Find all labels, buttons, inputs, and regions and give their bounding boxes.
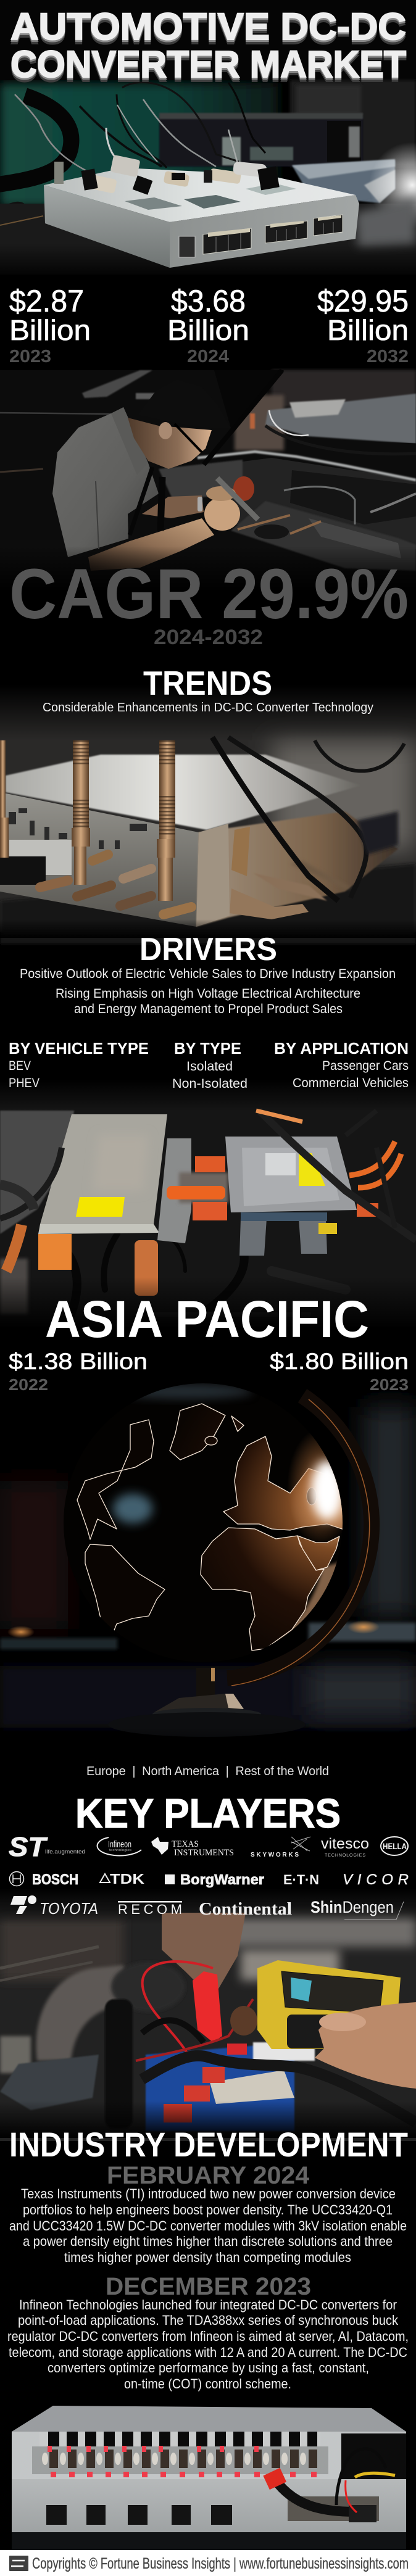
logo: Toyota: TOYOTA [40, 1899, 98, 1918]
logo: TDK: TDK [110, 1871, 144, 1887]
stat: asia pacific 2022: $1.38 Billion [9, 1349, 148, 1374]
stat: 2023: $2.87 [9, 284, 84, 318]
logo: Texas Instruments: INSTRUMENTS [174, 1848, 234, 1858]
heading: drivers: Rising Emphasis on High Voltage Electrical Architecture [56, 987, 360, 1001]
stat: asia pacific 2022 [9, 1349, 148, 1394]
photo: globe on stand [0, 1382, 416, 1765]
logo: Vicor: VICOR [343, 1871, 409, 1888]
photo: EV power electronics [0, 1080, 416, 1330]
stat: 2024: 2024 [187, 347, 229, 367]
heading: drivers [20, 932, 396, 1016]
heading: key players: KEY PLAYERS [75, 1791, 341, 1837]
stat: 2032: 2032 [367, 347, 409, 367]
stat: asia pacific 2023 [270, 1349, 409, 1394]
other regions: Europe | North America | Rest of the World [86, 1765, 329, 1778]
photo: open DC-DC converter unit [12, 2406, 406, 2550]
stat: 2023 [9, 284, 91, 367]
logo: Skyworks: SKYWORKS [251, 1852, 299, 1858]
logo: TDK [100, 1871, 144, 1887]
segment: by type: BY TYPE [174, 1039, 241, 1058]
logo: Recom: RECOM [118, 1902, 182, 1917]
logo row 2 [10, 1871, 409, 1888]
segment: by application: Commercial Vehicles [293, 1076, 409, 1090]
photo: battery charger on car battery [0, 1888, 416, 2141]
logo: Toyota [10, 1895, 98, 1918]
logo: Infineon: technologies [109, 1849, 132, 1852]
logo: Vitesco: TECHNOLOGIES [325, 1853, 365, 1858]
footer bar [0, 2550, 416, 2576]
logo row 1 [9, 1832, 408, 1862]
logo: ShinDengen: ShinDengen [310, 1898, 394, 1916]
logo: Continental: Continental [199, 1899, 292, 1919]
heading: drivers: and Energy Management to Propel Product Sales [74, 1002, 343, 1016]
segment: by type: Isolated [186, 1059, 233, 1074]
heading: asia pacific: ASIA PACIFIC [45, 1290, 369, 1348]
logo: BorgWarner: BorgWarner [180, 1871, 264, 1887]
stat: 2032: $29.95 [317, 284, 409, 318]
logo: Infineon [98, 1837, 141, 1855]
logo: ST: life.augmented [45, 1849, 85, 1855]
hero photo: DC-DC converter with cables [0, 0, 416, 370]
development: December 2023 [7, 2273, 409, 2392]
segment: by application: Passenger Cars [322, 1059, 409, 1073]
development: December 2023: converters optimize performance by using a fast, constant, [48, 2360, 369, 2375]
stat: asia pacific 2023: 2023 [370, 1375, 409, 1394]
development: February 2024: times higher power density than competing modules [64, 2250, 351, 2265]
CAGR period: 2024-2032 [154, 626, 263, 649]
heading: drivers: DRIVERS [139, 932, 277, 967]
logo: Fortune Business Insights [9, 2556, 28, 2571]
stat: 2024: Billion [167, 314, 249, 346]
stat: 2032 [317, 284, 409, 367]
stat: asia pacific 2022: 2022 [9, 1375, 48, 1394]
logo: Texas Instruments: TEXAS [172, 1839, 199, 1849]
segment: by vehicle type: PHEV [9, 1076, 40, 1090]
stat: 2023: 2023 [9, 347, 51, 367]
photo: technician working on engine [0, 370, 416, 592]
logo: Texas Instruments [151, 1837, 234, 1858]
development: December 2023: DECEMBER 2023 [106, 2273, 311, 2300]
title [10, 6, 406, 85]
segment: by type [172, 1039, 248, 1091]
logo: Skyworks [251, 1837, 310, 1858]
segment: by vehicle type: BEV [9, 1059, 31, 1073]
logo: ST: ST [9, 1832, 48, 1862]
logo: Infineon: Infineon [108, 1839, 131, 1850]
development: February 2024 [9, 2162, 407, 2265]
logo: Bosch: BOSCH [32, 1871, 78, 1888]
segment: by type: Non-Isolated [172, 1077, 248, 1091]
heading: trends: TRENDS [143, 664, 272, 702]
segment: by vehicle type [9, 1039, 149, 1090]
logo: Bosch [10, 1871, 78, 1888]
heading: trends [43, 664, 373, 714]
logo: Eaton: E·T·N [283, 1872, 319, 1887]
development: February 2024: FEBRUARY 2024 [107, 2162, 310, 2189]
stat: 2023: Billion [9, 314, 91, 346]
heading: drivers: Positive Outlook of Electric Vehicle Sales to Drive Industry Expansion [20, 967, 396, 981]
photo: converter with copper connectors [0, 685, 416, 944]
development: December 2023: on-time (COT) control scheme. [124, 2376, 291, 2392]
logo: ST [9, 1832, 85, 1862]
segment: by application [274, 1039, 409, 1090]
stat: 2024: $3.68 [171, 284, 246, 318]
logo: Hella: HELLA [383, 1841, 407, 1851]
stat: asia pacific 2023: $1.80 Billion [270, 1349, 409, 1374]
stat: 2032: Billion [327, 314, 409, 346]
logo: Vitesco: vitesco [321, 1836, 369, 1852]
stat: 2024 [167, 284, 249, 367]
title: AUTOMOTIVE DC-DC [10, 6, 406, 48]
title: CONVERTER MARKET [10, 43, 406, 85]
heading: trends: Considerable Enhancements in DC-DC Converter Technology [43, 701, 373, 714]
segment: by vehicle type: BY VEHICLE TYPE [9, 1039, 149, 1058]
logo: Hella [381, 1837, 408, 1855]
logo row 3 [10, 1895, 404, 1920]
segment: by application: BY APPLICATION [274, 1039, 409, 1058]
